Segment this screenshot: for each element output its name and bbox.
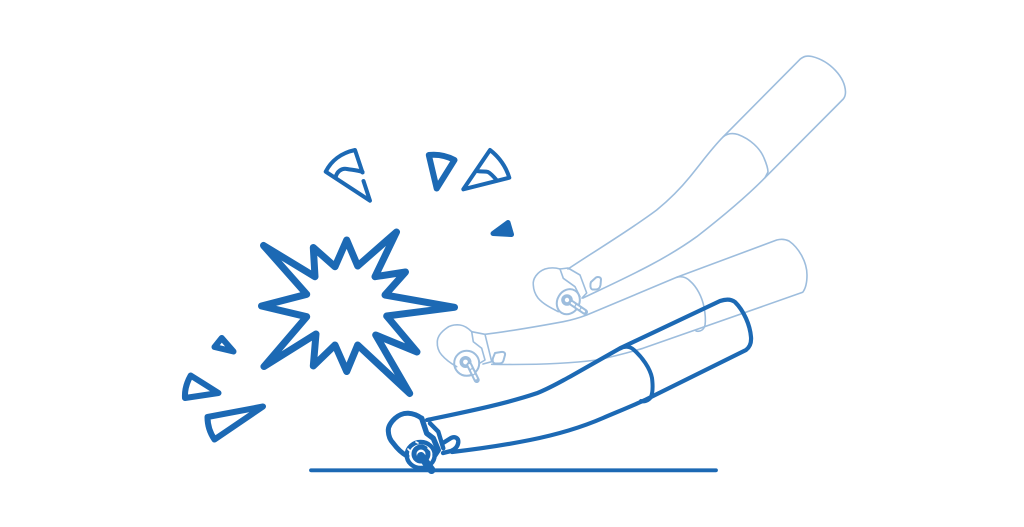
shard: top right with crack [463,150,509,189]
shard: lower left long [208,406,263,440]
handpiece: impact position [388,300,751,470]
ground line [311,468,716,472]
handpiece: faded middle position [437,239,807,380]
shard: small right [493,222,512,234]
shard: lower left middle [185,376,218,398]
shard: small left [214,338,234,352]
impact starburst [262,232,454,394]
shard: top centre [429,155,454,188]
handpiece: faded top position [533,56,846,318]
shard: top left with crack [326,150,370,201]
